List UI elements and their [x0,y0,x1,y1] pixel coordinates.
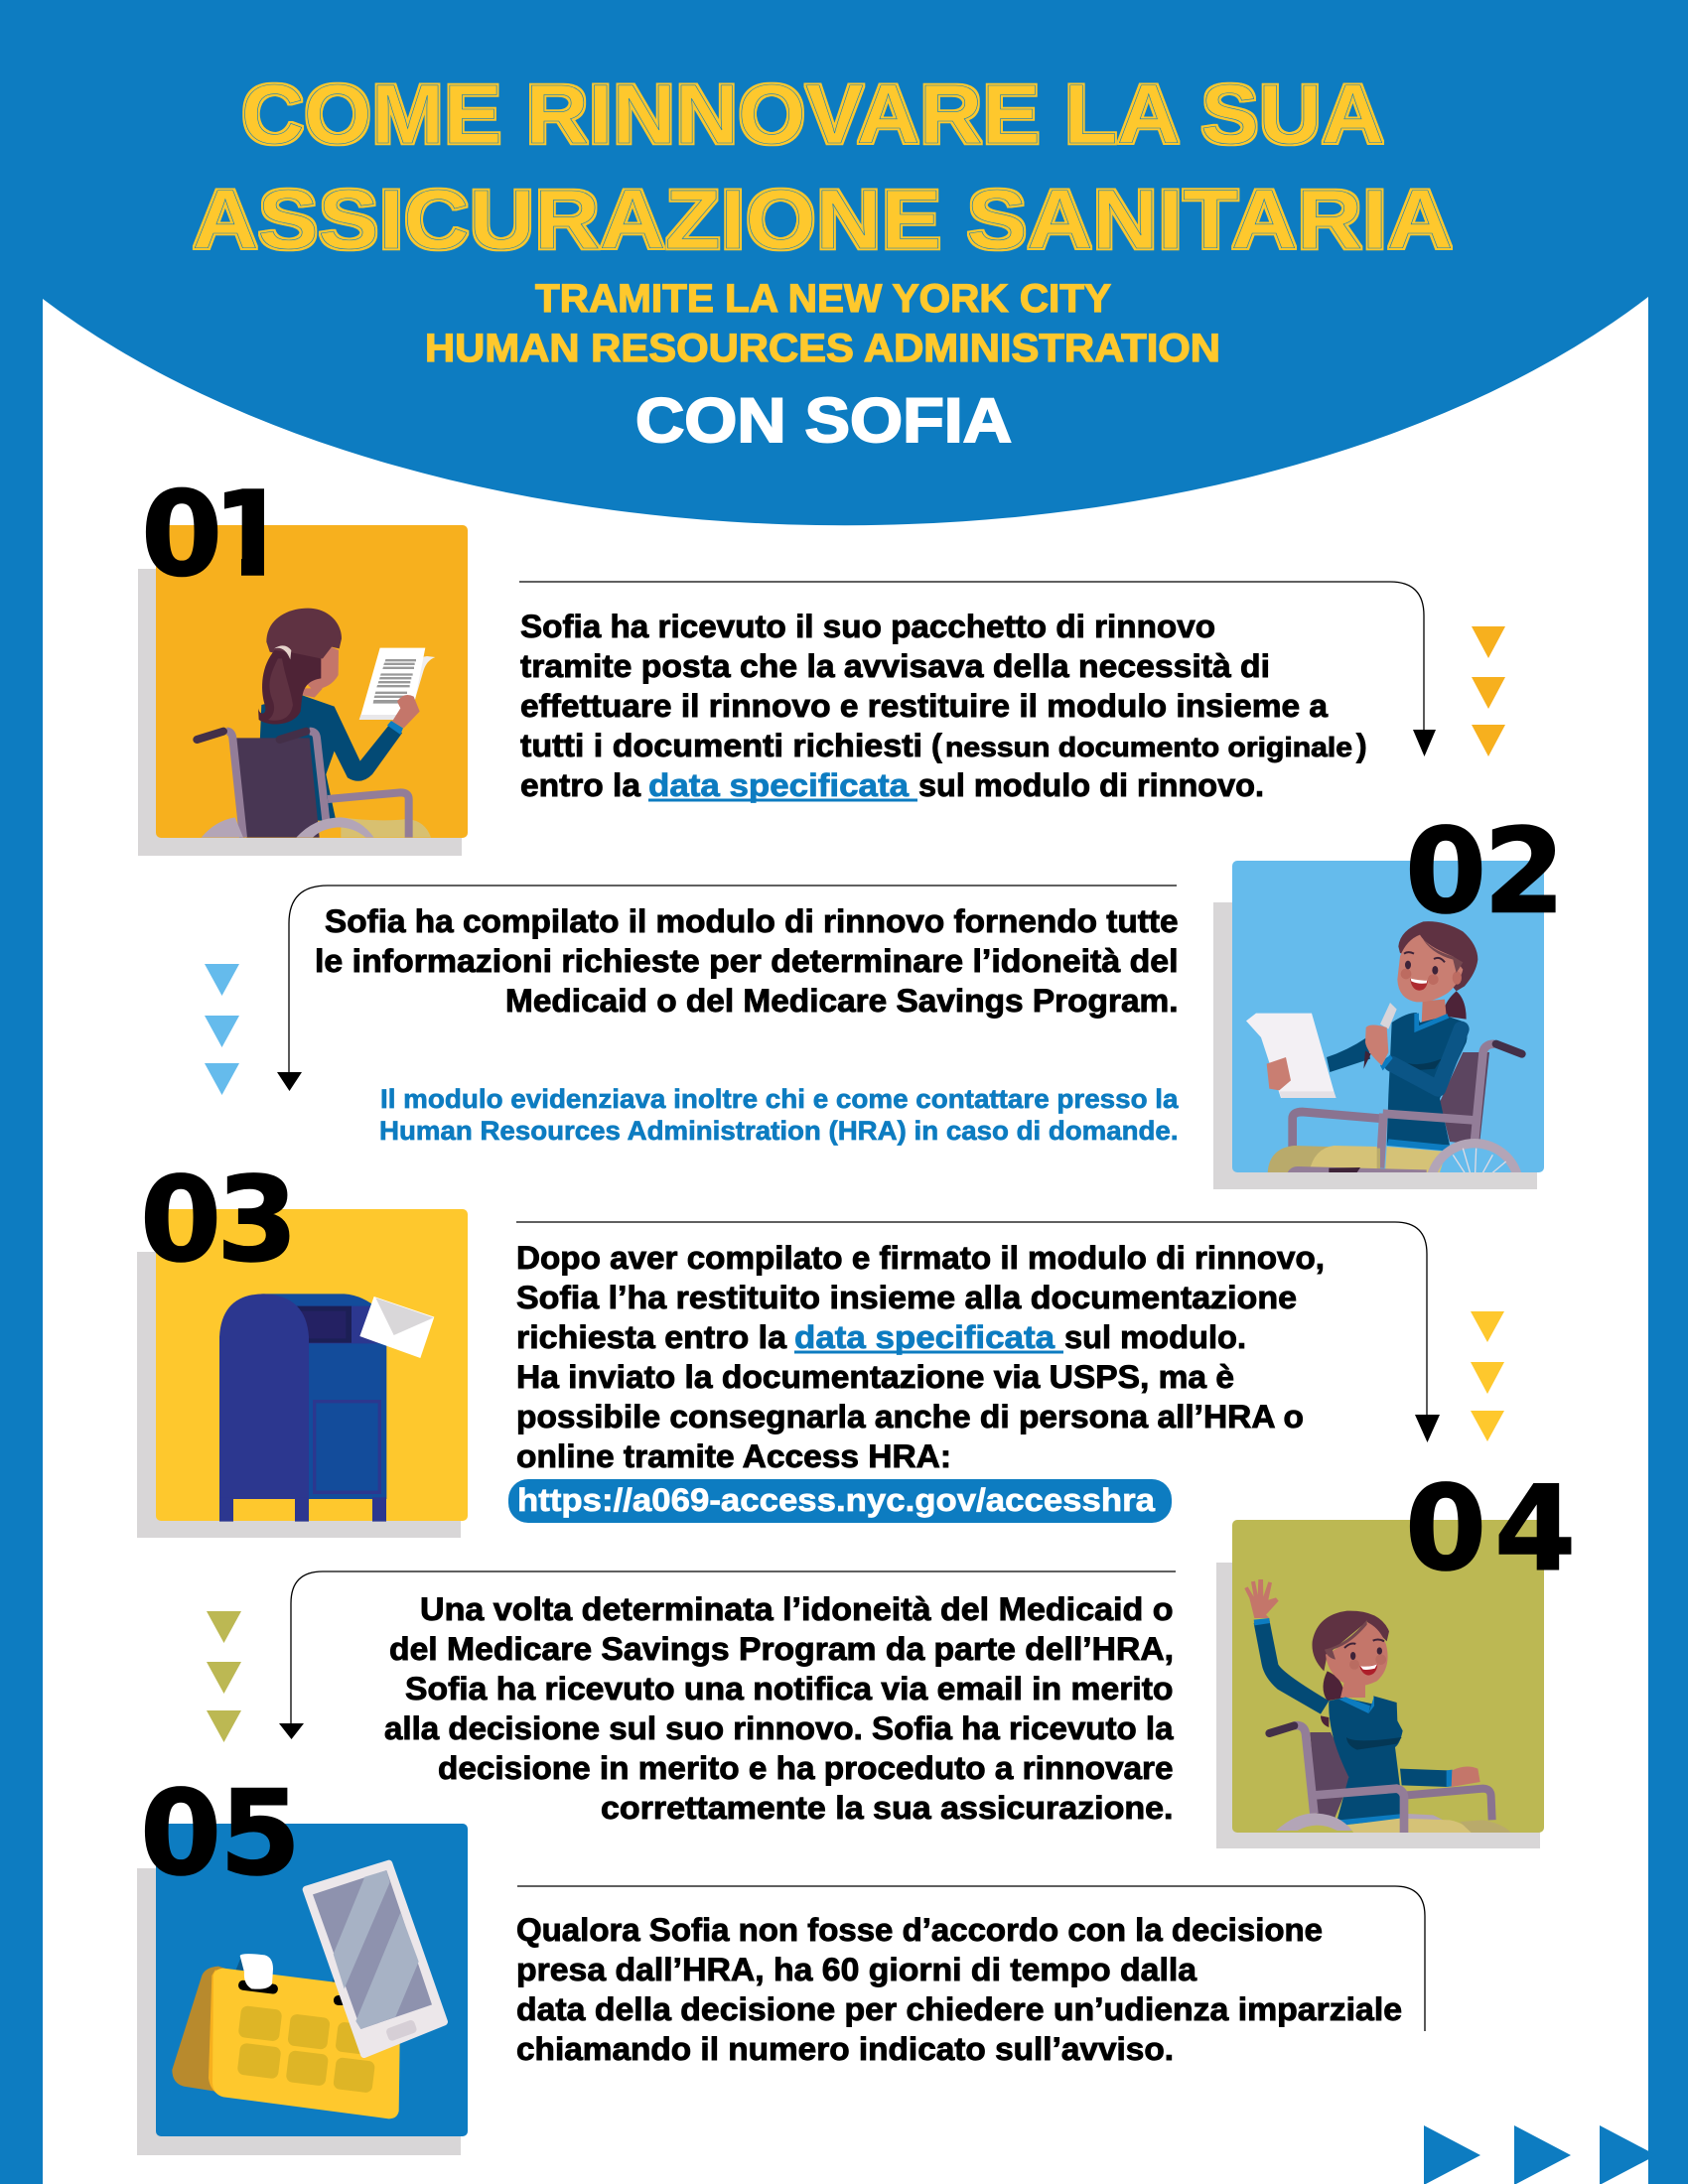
step 02 [205,824,1556,1189]
card shadow [137,1252,461,1538]
card shadow [1216,1563,1540,1848]
next-page triangle arrows [1424,2125,1656,2184]
card shadow [138,569,462,856]
step 05 [137,1765,1425,2155]
card background [1232,861,1544,1172]
illustration: Sofia filling in form [1246,921,1526,1172]
step 01 text: sul modulo di rinnovo. [918,767,1264,803]
step 04 text: del Medicare Savings Program da parte dell’HRA, [389,1631,1174,1667]
step 01 text: Sofia ha ricevuto il suo pacchetto di rinnovo [520,609,1215,644]
step 03 text: sul modulo. [1064,1319,1246,1355]
title line 2: ASSICURAZIONE SANITARIA [193,173,1453,266]
number 02: 02 [1405,802,1565,939]
step 01 text: entro la [520,767,640,803]
step 03 text [516,1240,1325,1474]
step 01 text: ( [931,728,942,763]
illustration: calendar and smartphone [172,1863,444,2118]
card background [156,1824,468,2136]
card background [156,525,468,838]
step 04 text: Una volta determinata l’idoneità del Medicaid o [420,1591,1174,1627]
step 01 text: effettuare il rinnovo e restituire il modulo insieme a [520,688,1328,724]
triangle markers [205,964,239,1095]
connector arrow [519,582,1436,756]
step 02 text: Medicaid o del Medicare Savings Program. [505,983,1178,1019]
step 04 text [384,1591,1174,1826]
step 05 text: Qualora Sofia non fosse d’accordo con la decisione [516,1912,1323,1948]
illustration: Sofia waving [1244,1579,1511,1833]
step 03 text: Dopo aver compilato e firmato il modulo di rinnovo, [516,1240,1325,1276]
step 03 text: Ha inviato la documentazione via USPS, ma è [516,1359,1234,1395]
title line 1: COME RINNOVARE LA SUA [241,68,1384,161]
step 03 [137,1152,1504,1538]
URL pill: https://a069-access.nyc.gov/accesshra [517,1482,1155,1518]
step 03 text: possibile consegnarla anche di persona all’HRA o [516,1399,1304,1434]
step 04 text: correttamente la sua assicurazione. [601,1790,1174,1826]
step 05 text: data della decisione per chiedere un’udienza imparziale [516,1991,1402,2027]
step 03 text: online tramite Access HRA: [516,1438,951,1474]
number 05: 05 [140,1765,301,1902]
step 03 text: richiesta entro la [516,1319,786,1355]
connector line [517,1886,1425,2031]
step 02 text: le informazioni richieste per determinare l’idoneità del [315,943,1178,979]
step 05 text [516,1912,1402,2067]
step 02 note in blue [379,1084,1180,1146]
card shadow [137,1868,461,2155]
step 04 text: alla decisione sul suo rinnovo. Sofia ha ricevuto la [384,1710,1174,1746]
step 05 text: chiamando il numero indicato sull’avviso. [516,2031,1174,2067]
step 01 text: ) [1356,728,1367,763]
number 01: 1 [210,466,291,603]
step 01 [138,466,1505,856]
illustration: blue mailbox with envelope [219,1294,434,1522]
connector arrow [279,1571,1176,1739]
connector arrow [277,886,1177,1091]
step 01 text [520,609,1367,803]
step 02 text: Sofia ha compilato il modulo di rinnovo fornendo tutte [325,903,1178,939]
step 01 text: tramite posta che la avvisava della necessità di [520,648,1270,684]
step 05 text: presa dall’HRA, ha 60 giorni di tempo dalla [516,1952,1196,1987]
subtitle line 1: TRAMITE LA NEW YORK CITY [535,277,1111,321]
triangle markers [1472,626,1505,756]
step 02 note in blue: Il modulo evidenziava inoltre chi e come contattare presso la [380,1084,1180,1114]
number 03: 03 [140,1152,298,1289]
illustration: Sofia reading letter from behind [197,609,435,838]
step 03 text: data specificata [794,1319,1055,1355]
step 04 text: Sofia ha ricevuto una notifica via email in merito [405,1671,1174,1706]
triangle markers [1471,1311,1504,1441]
step 01 text: nessun documento originale [945,732,1352,762]
step 02 note in blue: Human Resources Administration (HRA) in caso di domande. [379,1116,1178,1146]
card background [1232,1520,1544,1833]
triangle markers [207,1611,241,1742]
step 04 text: decisione in merito e ha proceduto a rinnovare [438,1750,1174,1786]
step 01 text: data specificata [648,767,909,803]
heading block [193,68,1453,456]
step 03 text: Sofia l’ha restituito insieme alla documentazione [516,1280,1297,1315]
card background [156,1209,468,1521]
number 01 [145,486,264,578]
step 01 text: tutti i documenti richiesti [520,728,922,763]
number 04: 04 [1405,1459,1576,1596]
subtitle: con Sofia: CON SOFIA [635,386,1012,456]
step 04 [207,1459,1576,1848]
card shadow [1213,902,1537,1189]
connector arrow [516,1222,1440,1442]
number 01: 0 [141,466,222,603]
step 02 text [315,903,1178,1019]
subtitle line 2: HUMAN RESOURCES ADMINISTRATION [425,327,1220,370]
